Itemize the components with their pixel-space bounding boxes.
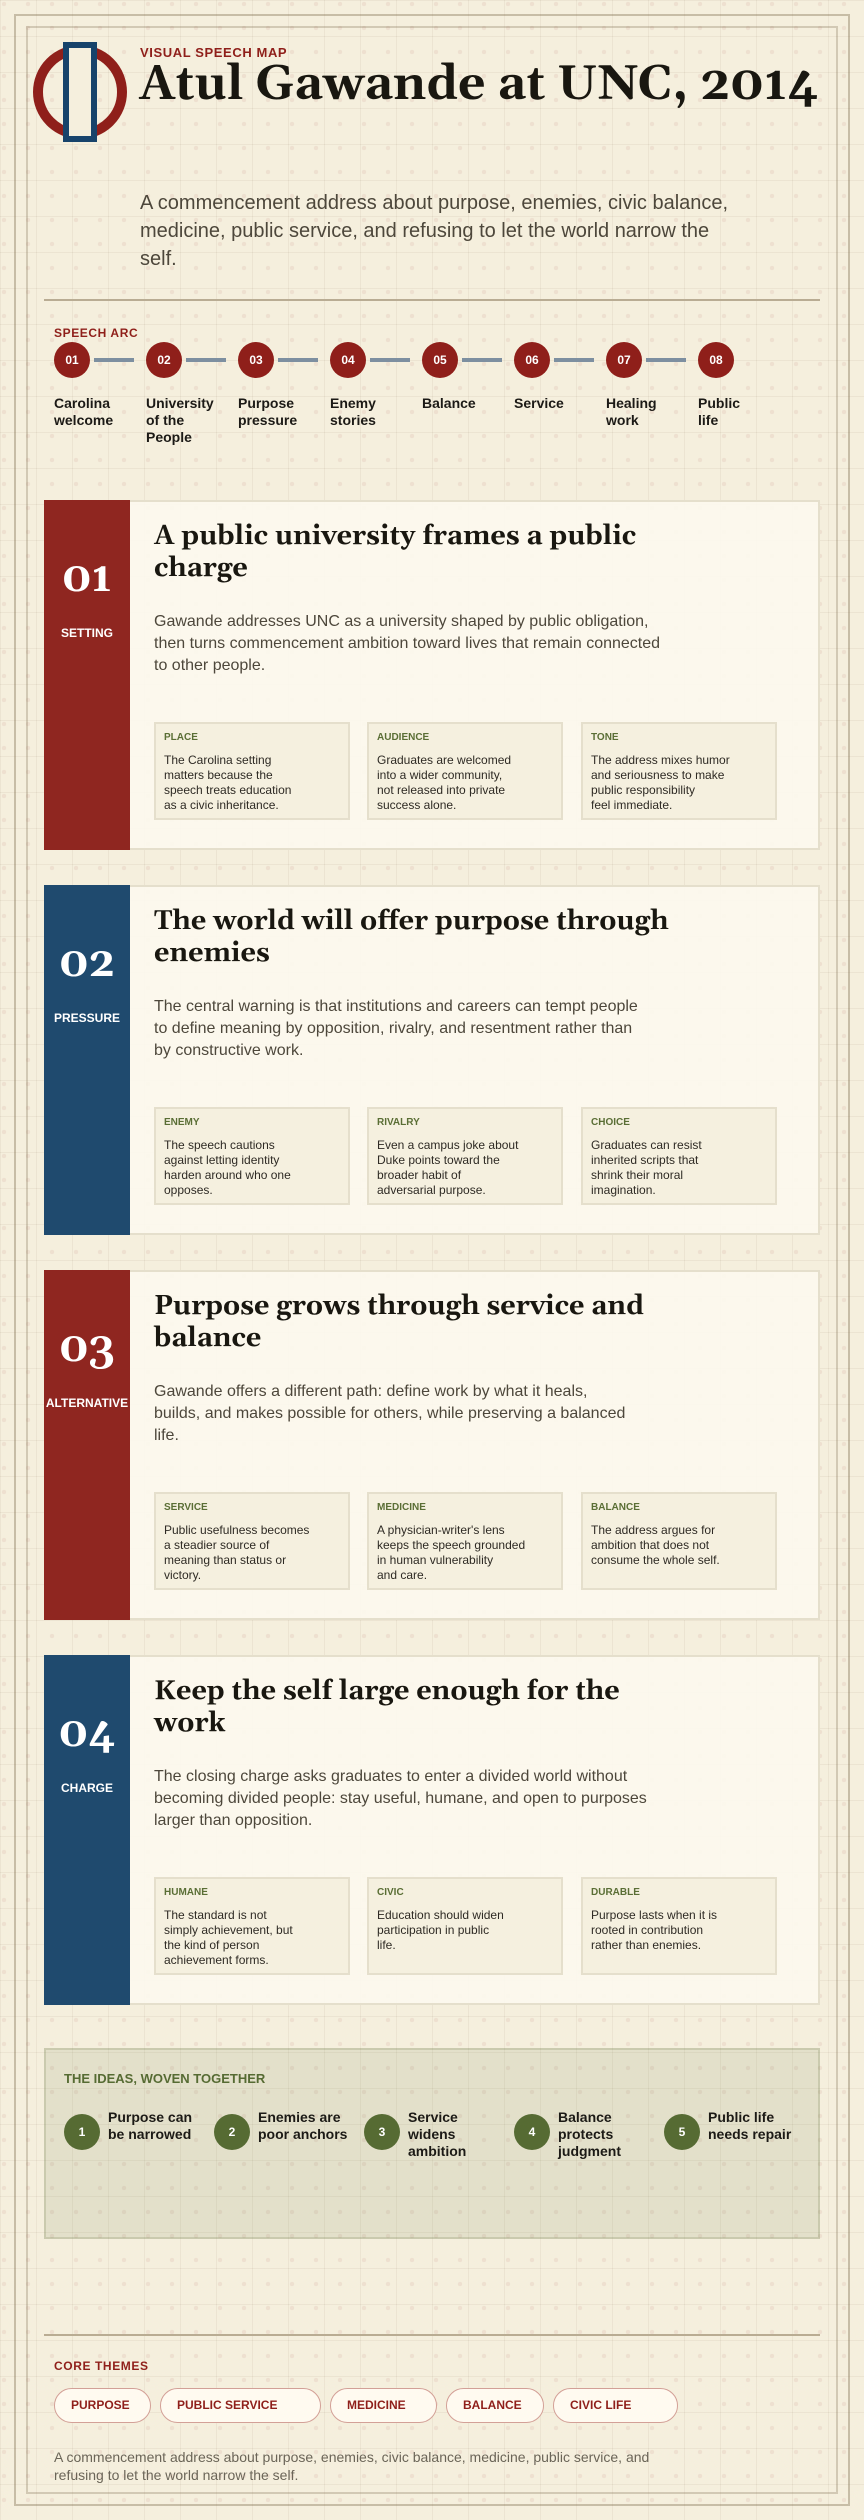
label 03: pressure [238, 412, 297, 428]
section text 02 [154, 998, 638, 1059]
box: medicine: and care. [377, 1568, 427, 1582]
idea 3 text [408, 2109, 466, 2159]
subtitle: medicine, public service, and refusing to let the world narrow the [140, 220, 709, 242]
label 07: work [606, 412, 639, 428]
idea 5 text: Public life [708, 2109, 774, 2125]
icon: circle with vertical column [33, 42, 127, 142]
section text 02: by constructive work. [154, 1042, 303, 1059]
idea 3: 3 [379, 2125, 385, 2139]
box: durable: rooted in contribution [591, 1923, 703, 1937]
box: choice: inherited scripts that [591, 1153, 698, 1167]
pill: public service [160, 2388, 321, 2423]
section heading 02 [154, 905, 669, 971]
idea 3 text: widens [408, 2126, 455, 2142]
label 03: Purpose [238, 395, 294, 411]
box: durable: DURABLE [591, 1887, 640, 1898]
step 08 [698, 342, 734, 378]
box: humane: HUMANE [164, 1887, 208, 1898]
idea 2: 2 [229, 2125, 235, 2139]
idea 3 [364, 2114, 400, 2150]
box: rivalry: Duke points toward the [377, 1153, 500, 1167]
box: choice: imagination. [591, 1183, 656, 1197]
idea 1 text [108, 2109, 192, 2142]
pill: purpose [54, 2388, 151, 2423]
step 08: 08 [709, 353, 723, 367]
idea 3 text: ambition [408, 2143, 466, 2159]
section heading 01 [154, 520, 636, 586]
label 05: Balance [422, 395, 476, 411]
section band 04 [44, 1655, 130, 2005]
ideas heading: THE IDEAS, WOVEN TOGETHER [64, 2071, 265, 2086]
section band 04: CHARGE [61, 1781, 113, 1795]
section text 04 [154, 1768, 647, 1829]
box: place: PLACE [164, 732, 198, 743]
box: balance: The address argues for [591, 1523, 715, 1537]
section heading 03 [154, 1290, 644, 1356]
box: service [154, 1492, 350, 1590]
title: Atul Gawande at UNC, 2014 [139, 55, 818, 116]
label 08: life [698, 412, 718, 428]
label 04: stories [330, 412, 376, 428]
pill: balance: BALANCE [463, 2398, 522, 2412]
box: medicine: keeps the speech grounded [377, 1538, 525, 1552]
section text 04: The closing charge asks graduates to enter a divided world without [154, 1768, 627, 1785]
idea 5: 5 [679, 2125, 685, 2139]
idea 1: 1 [79, 2125, 85, 2139]
section heading 02: The world will offer purpose through [154, 905, 669, 939]
idea 4 text: Balance [558, 2109, 612, 2125]
section text 01: to other people. [154, 657, 265, 674]
box: place [154, 722, 350, 820]
box: place: speech treats education [164, 783, 291, 797]
box: medicine: A physician-writer's lens [377, 1523, 505, 1537]
section text 03: builds, and makes possible for others, while preserving a balanced [154, 1405, 625, 1422]
box: choice: Graduates can resist [591, 1138, 702, 1152]
step 01: 01 [65, 353, 79, 367]
box: rivalry [367, 1107, 563, 1205]
label 01: welcome [54, 412, 113, 428]
arc heading: SPEECH ARC [54, 326, 138, 340]
box: tone: TONE [591, 732, 619, 743]
section band 01: 01 [62, 553, 112, 606]
idea 2 text: Enemies are [258, 2109, 340, 2125]
box: rivalry: Even a campus joke about [377, 1138, 518, 1152]
idea 1 text: be narrowed [108, 2126, 191, 2142]
step 05 [422, 342, 458, 378]
footer text: A commencement address about purpose, enemies, civic balance, medicine, public service, and [54, 2449, 649, 2465]
section band 02 [44, 885, 130, 1235]
section heading 03: balance [154, 1322, 261, 1356]
box: durable: rather than enemies. [591, 1938, 701, 1952]
box: medicine: MEDICINE [377, 1502, 426, 1513]
label 01 [54, 395, 113, 428]
box: tone: The address mixes humor [591, 753, 730, 767]
section band 03 [44, 1270, 130, 1620]
subtitle: A commencement address about purpose, enemies, civic balance, [140, 192, 728, 214]
box: enemy: opposes. [164, 1183, 213, 1197]
idea 2 text: poor anchors [258, 2126, 347, 2142]
box: audience: not released into private [377, 783, 505, 797]
step 03 [238, 342, 274, 378]
box: civic: CIVIC [377, 1887, 404, 1898]
section text 01 [154, 613, 660, 674]
section text 04: larger than opposition. [154, 1812, 312, 1829]
panel: section 04 charge [44, 1655, 820, 2005]
box: durable [581, 1877, 777, 1975]
section text 03: life. [154, 1427, 179, 1444]
box: enemy: ENEMY [164, 1117, 200, 1128]
box: service: SERVICE [164, 1502, 208, 1513]
label 02: People [146, 429, 192, 445]
box: tone: public responsibility [591, 783, 695, 797]
box: tone [581, 722, 777, 820]
idea 4 text: judgment [558, 2143, 621, 2159]
box: balance: ambition that does not [591, 1538, 709, 1552]
section text 02: to define meaning by opposition, rivalry, and resentment rather than [154, 1020, 632, 1037]
section heading 04: work [154, 1707, 226, 1741]
idea 1 [64, 2114, 100, 2150]
section heading 04: Keep the self large enough for the [154, 1675, 620, 1709]
box: civic: Education should widen [377, 1908, 504, 1922]
pill: medicine [330, 2388, 437, 2423]
box: choice: shrink their moral [591, 1168, 683, 1182]
footer text: refusing to let the world narrow the self. [54, 2467, 298, 2483]
pill: civic life: CIVIC LIFE [570, 2398, 631, 2412]
box: audience: AUDIENCE [377, 732, 429, 743]
section band 01: SETTING [61, 626, 113, 640]
section band 04: 04 [59, 1708, 115, 1761]
step 06: 06 [525, 353, 539, 367]
idea 5 [664, 2114, 700, 2150]
header [33, 42, 820, 301]
panel: section 03 alternative [44, 1270, 820, 1620]
section heading 01: charge [154, 552, 248, 586]
pill: balance [446, 2388, 544, 2423]
box: choice: CHOICE [591, 1117, 630, 1128]
box: audience: success alone. [377, 798, 456, 812]
section band 02: PRESSURE [54, 1011, 120, 1025]
label 07 [606, 395, 657, 428]
box: civic: life. [377, 1938, 396, 1952]
box: enemy: The speech cautions [164, 1138, 275, 1152]
step 03: 03 [249, 353, 263, 367]
panel: section 02 pressure [44, 885, 820, 1235]
section text 03: Gawande offers a different path: define work by what it heals, [154, 1383, 587, 1400]
section heading 03: Purpose grows through service and [154, 1290, 644, 1324]
box: audience: into a wider community, [377, 768, 502, 782]
box: durable: Purpose lasts when it is [591, 1908, 717, 1922]
section band 02: 02 [59, 938, 115, 991]
step 06 [514, 342, 550, 378]
step 04: 04 [341, 353, 355, 367]
box: rivalry: broader habit of [377, 1168, 461, 1182]
subtitle [140, 192, 728, 270]
label 08: Public [698, 395, 740, 411]
label 02: University [146, 395, 214, 411]
box: enemy: harden around who one [164, 1168, 291, 1182]
core themes heading: CORE THEMES [54, 2359, 149, 2373]
section heading 02: enemies [154, 937, 270, 971]
section text 02: The central warning is that institutions and careers can tempt people [154, 998, 638, 1015]
label 04 [330, 395, 376, 428]
idea 2 [214, 2114, 250, 2150]
box: medicine [367, 1492, 563, 1590]
box: humane: the kind of person [164, 1938, 259, 1952]
box: civic [367, 1877, 563, 1975]
step 07: 07 [617, 353, 631, 367]
box: audience [367, 722, 563, 820]
idea 4 [514, 2114, 550, 2150]
box: humane: The standard is not [164, 1908, 267, 1922]
label 01: Carolina [54, 395, 110, 411]
idea 2 text [258, 2109, 347, 2142]
section text 04: becoming divided people: stay useful, humane, and open to purposes [154, 1790, 647, 1807]
section band 03: ALTERNATIVE [46, 1396, 128, 1410]
box: humane: achievement forms. [164, 1953, 269, 1967]
idea 3 text: Service [408, 2109, 458, 2125]
section text 01: then turns commencement ambition toward lives that remain connected [154, 635, 660, 652]
panel: ideas woven together [44, 2048, 820, 2239]
box: medicine: in human vulnerability [377, 1553, 493, 1567]
label 03 [238, 395, 297, 428]
label 04: Enemy [330, 395, 376, 411]
section band 03: 03 [59, 1323, 115, 1376]
box: rivalry: RIVALRY [377, 1117, 420, 1128]
step 02 [146, 342, 182, 378]
box: service: victory. [164, 1568, 201, 1582]
box: civic: participation in public [377, 1923, 489, 1937]
box: enemy [154, 1107, 350, 1205]
panel: section 01 setting [44, 500, 820, 850]
idea 1 text: Purpose can [108, 2109, 192, 2125]
step 02: 02 [157, 353, 171, 367]
pill: purpose: PURPOSE [71, 2398, 130, 2412]
pill: public service: PUBLIC SERVICE [177, 2398, 277, 2412]
box: place: matters because the [164, 768, 273, 782]
step 04 [330, 342, 366, 378]
section band 01 [44, 500, 130, 850]
idea 5 text [708, 2109, 792, 2142]
section heading 01: A public university frames a public [154, 520, 636, 554]
box: service: meaning than status or [164, 1553, 286, 1567]
label 08 [698, 395, 740, 428]
box: audience: Graduates are welcomed [377, 753, 511, 767]
label 06: Service [514, 395, 564, 411]
label 02: of the [146, 412, 184, 428]
step 05: 05 [433, 353, 447, 367]
box: balance: consume the whole self. [591, 1553, 720, 1567]
idea 4 text [558, 2109, 621, 2159]
pill: medicine: MEDICINE [347, 2398, 406, 2412]
step 01 [54, 342, 90, 378]
box: tone: feel immediate. [591, 798, 672, 812]
pill: civic life [553, 2388, 678, 2423]
box: place: as a civic inheritance. [164, 798, 279, 812]
idea 5 text: needs repair [708, 2126, 791, 2142]
box: rivalry: adversarial purpose. [377, 1183, 486, 1197]
box: choice [581, 1107, 777, 1205]
section text 03 [154, 1383, 625, 1444]
box: service: a steadier source of [164, 1538, 269, 1552]
idea 4 text: protects [558, 2126, 613, 2142]
subtitle: self. [140, 248, 177, 270]
box: humane [154, 1877, 350, 1975]
step 07 [606, 342, 642, 378]
box: humane: simply achievement, but [164, 1923, 293, 1937]
label 02 [146, 395, 214, 445]
section text 01: Gawande addresses UNC as a university shaped by public obligation, [154, 613, 648, 630]
section heading 04 [154, 1675, 620, 1741]
footer text [54, 2449, 649, 2483]
box: place: The Carolina setting [164, 753, 271, 767]
box: tone: and seriousness to make [591, 768, 724, 782]
eyebrow: VISUAL SPEECH MAP [140, 45, 287, 60]
idea 4: 4 [529, 2125, 535, 2139]
speech arc timeline [54, 326, 740, 445]
box: balance [581, 1492, 777, 1590]
box: balance: BALANCE [591, 1502, 640, 1513]
box: enemy: against letting identity [164, 1153, 279, 1167]
box: service: Public usefulness becomes [164, 1523, 309, 1537]
label 07: Healing [606, 395, 657, 411]
